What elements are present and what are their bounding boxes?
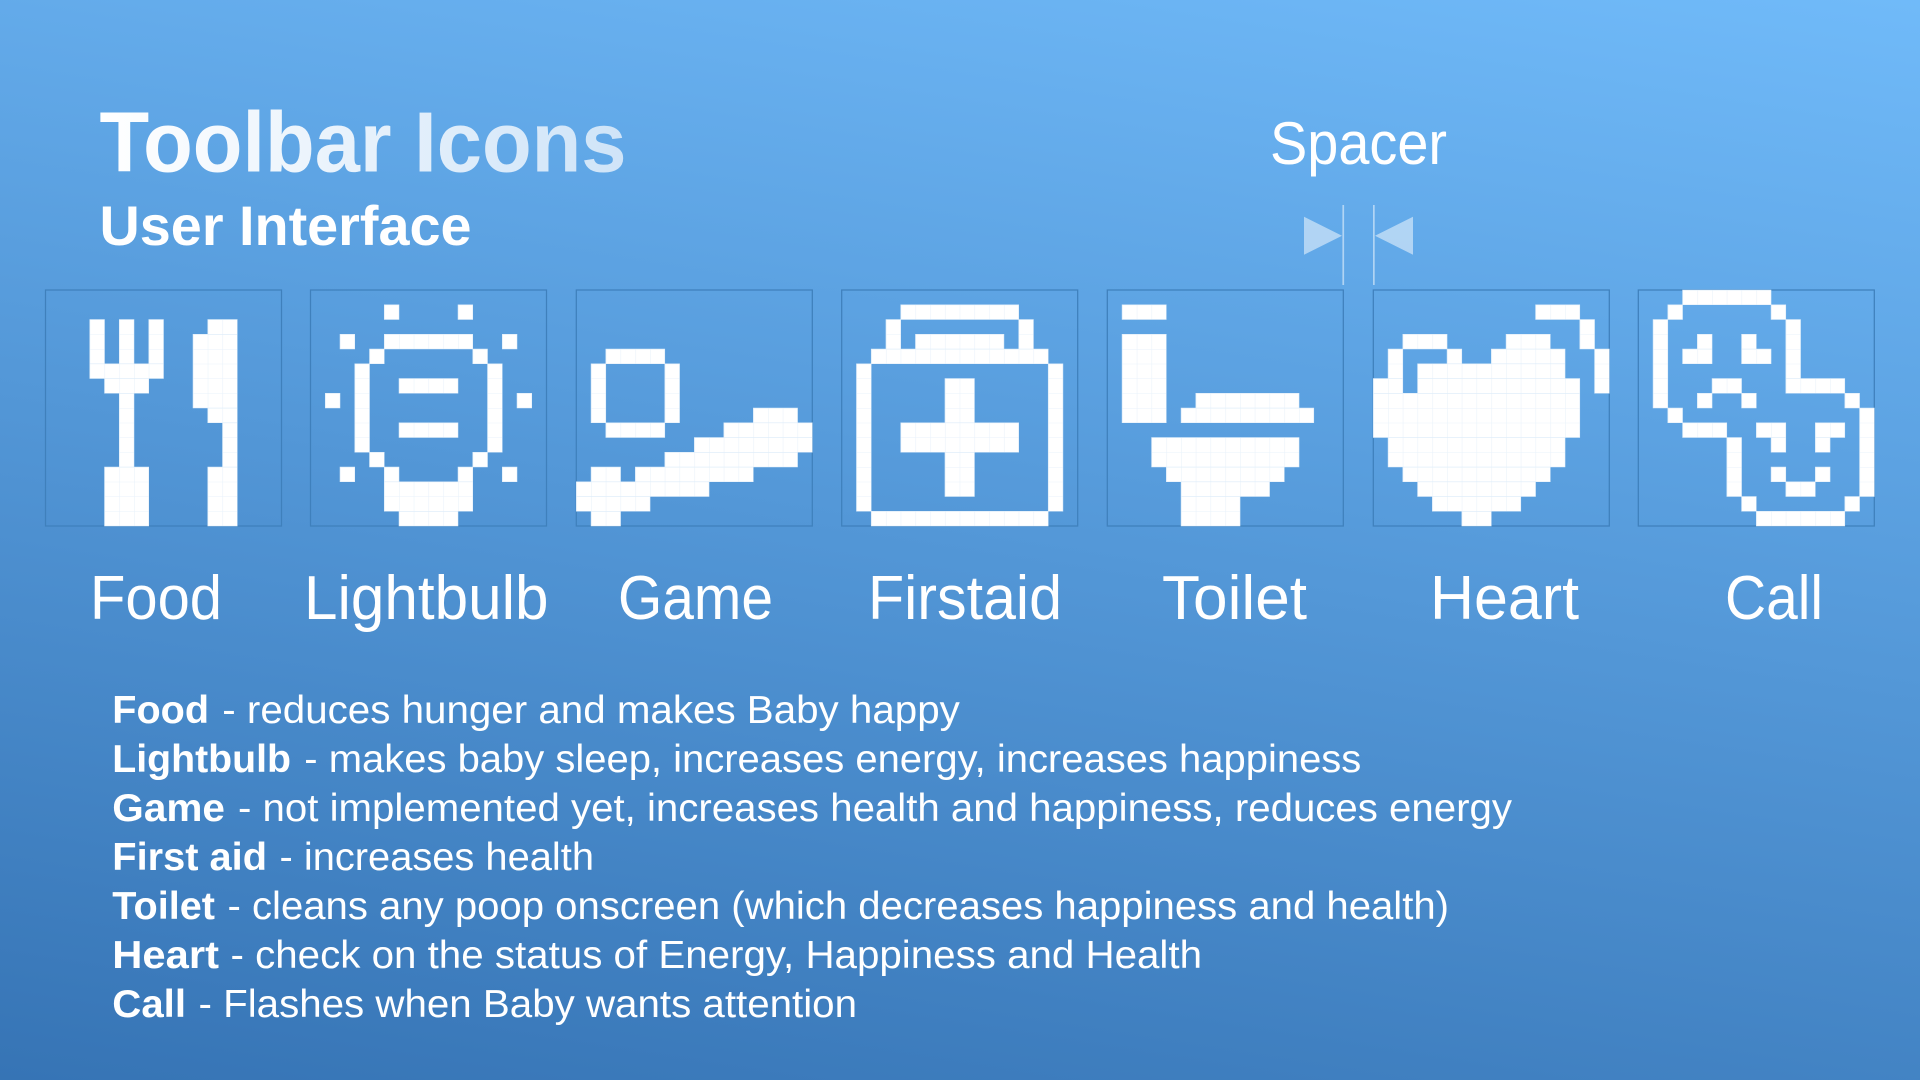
lightbulb description: - makes baby sleep, increases energy, increases happiness <box>304 738 1361 781</box>
icon labels: Toilet <box>1162 564 1307 633</box>
lightbulb description: Lightbulb <box>112 738 291 781</box>
icon: firstaid <box>842 290 1078 526</box>
icon labels: Call <box>1725 564 1823 633</box>
icon labels: Heart <box>1430 564 1579 633</box>
icon: call <box>1638 290 1874 526</box>
icon: game <box>576 290 812 526</box>
icon labels: Game <box>618 564 773 633</box>
description list <box>112 689 1513 1026</box>
food description: - reduces hunger and makes Baby happy <box>222 689 960 732</box>
game description: - not implemented yet, increases health and happiness, reduces energy <box>238 787 1513 830</box>
icon labels: Food <box>90 564 222 633</box>
toilet description: - cleans any poop onscreen (which decreases happiness and health) <box>228 885 1449 928</box>
icon: toilet <box>1107 290 1343 526</box>
spacer label: Spacer <box>1270 110 1447 177</box>
game description: Game <box>112 787 225 830</box>
food description: Food <box>112 689 209 732</box>
icon: lightbulb <box>310 290 546 526</box>
icon labels: Lightbulb <box>304 564 548 633</box>
icon labels: Firstaid <box>868 564 1062 633</box>
icon: food <box>46 290 282 526</box>
first aid description: First aid <box>112 836 267 879</box>
call description: - Flashes when Baby wants attention <box>198 983 857 1026</box>
call description: Call <box>112 983 186 1026</box>
heart description: Heart <box>112 934 219 977</box>
toilet description: Toilet <box>112 885 215 928</box>
icon: heart <box>1373 290 1609 526</box>
first aid description <box>112 836 594 879</box>
first aid description: - increases health <box>280 836 594 879</box>
spacer indicator arrows <box>1304 205 1413 285</box>
heart description: - check on the status of Energy, Happiness and Health <box>230 934 1202 977</box>
icon labels <box>90 564 1823 633</box>
subtitle: User Interface <box>100 194 472 257</box>
title: Toolbar Icons <box>100 96 626 190</box>
